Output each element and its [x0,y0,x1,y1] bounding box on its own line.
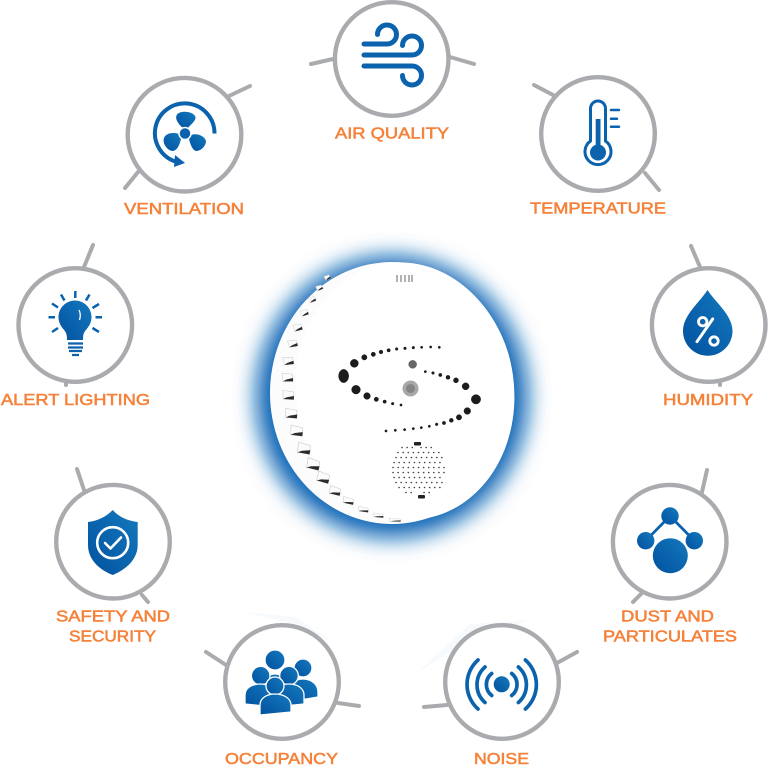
panel: occupancy [206,625,359,765]
label line 2: PARTICULATES [603,628,737,646]
connector ticks [311,57,474,64]
device face [279,248,531,534]
label: HUMIDITY [663,392,753,409]
LED ring and sensor holes [339,346,481,432]
label: DUST AND [621,608,714,626]
connector ticks [424,652,577,707]
icon: light bulb [48,291,102,355]
panel: humidity [652,246,766,409]
icon: sound waves [467,660,536,709]
label: TEMPERATURE [530,200,666,218]
speaker grille [393,442,446,498]
connector ticks [206,652,359,706]
ring [652,268,766,382]
icon: particles [637,507,703,573]
label: SAFETY AND [56,608,170,626]
connector ticks [125,86,250,188]
panel: dust and particulates [603,470,737,646]
panel: air quality [311,2,474,143]
ring [541,77,655,191]
icon: wind [364,25,422,85]
icon: group of people [245,650,318,715]
label: VENTILATION [124,201,244,218]
panel: temperature [530,77,666,218]
ring [445,625,559,739]
label line 2: SECURITY [69,628,156,646]
label: ALERT LIGHTING [1,392,150,409]
top vent slots [397,275,412,282]
ring [56,485,170,598]
panel: alert lighting [1,245,150,409]
ring [225,625,339,739]
icon: thermometer [585,101,619,165]
ring [19,268,132,382]
blue glow [256,256,528,538]
ring [128,78,241,192]
icon: fan [155,103,215,167]
icon: shield [88,510,138,575]
sensor device with blue glow [256,248,531,538]
connector ticks [77,469,148,602]
icon: percent drop [683,290,732,356]
motion sensor lens [400,377,422,399]
connector ticks [691,246,720,385]
side vents [282,274,401,522]
device body [270,262,514,524]
ring [335,2,449,116]
connector ticks [633,470,707,602]
panel: safety and security [56,469,170,646]
connector ticks [66,245,93,385]
panel: ventilation [124,78,250,218]
ring [613,485,726,598]
label: AIR QUALITY [335,126,449,142]
connector ticks [534,85,659,190]
panel: noise [424,625,577,765]
faint background patches [245,612,530,672]
